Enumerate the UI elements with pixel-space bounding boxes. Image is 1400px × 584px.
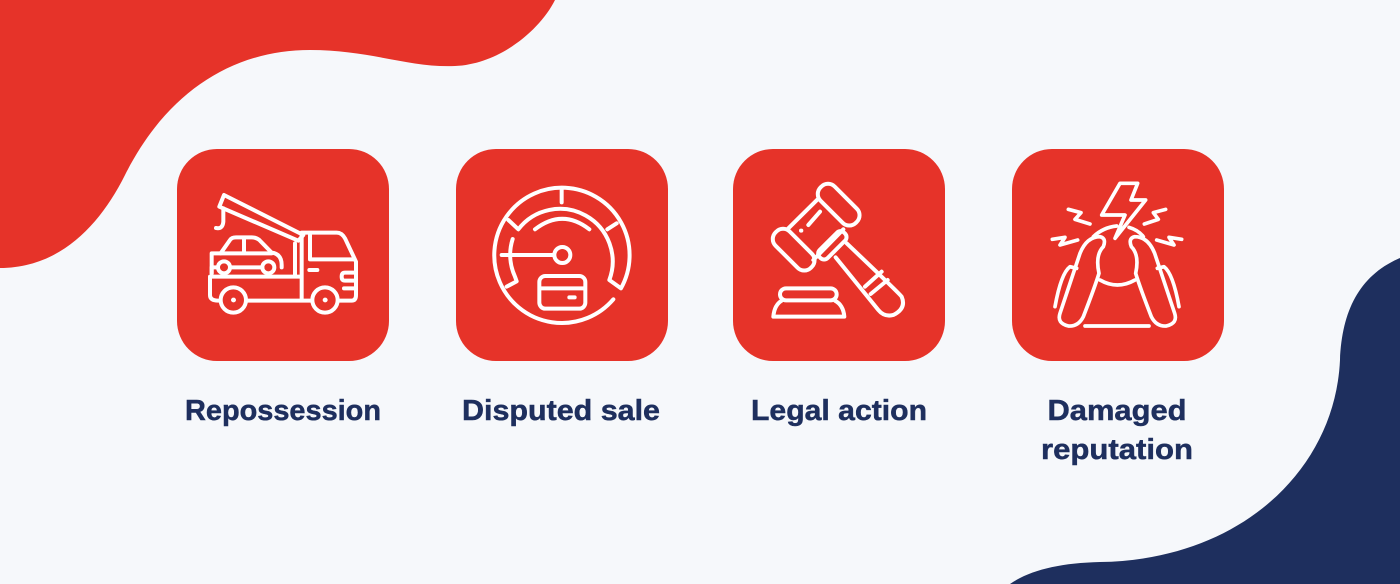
label: damaged reputation — [1041, 395, 1193, 466]
icon: stressed person — [1052, 183, 1182, 326]
label: legal action: Legal action — [751, 395, 927, 427]
icon: gavel — [769, 180, 903, 317]
icon: tow truck — [210, 195, 356, 313]
red blob top-left — [0, 0, 555, 268]
card: disputed sale — [456, 149, 668, 361]
card: repossession — [177, 149, 389, 361]
navy blob bottom-right — [1010, 258, 1400, 584]
label: disputed sale: Disputed sale — [462, 395, 660, 427]
label: damaged reputation: reputation — [1041, 434, 1193, 466]
card: damaged reputation — [1012, 149, 1224, 361]
label: repossession: Repossession — [185, 395, 381, 427]
label: damaged reputation: Damaged — [1048, 395, 1186, 427]
icon: credit score gauge — [494, 188, 630, 323]
card: legal action — [733, 149, 945, 361]
